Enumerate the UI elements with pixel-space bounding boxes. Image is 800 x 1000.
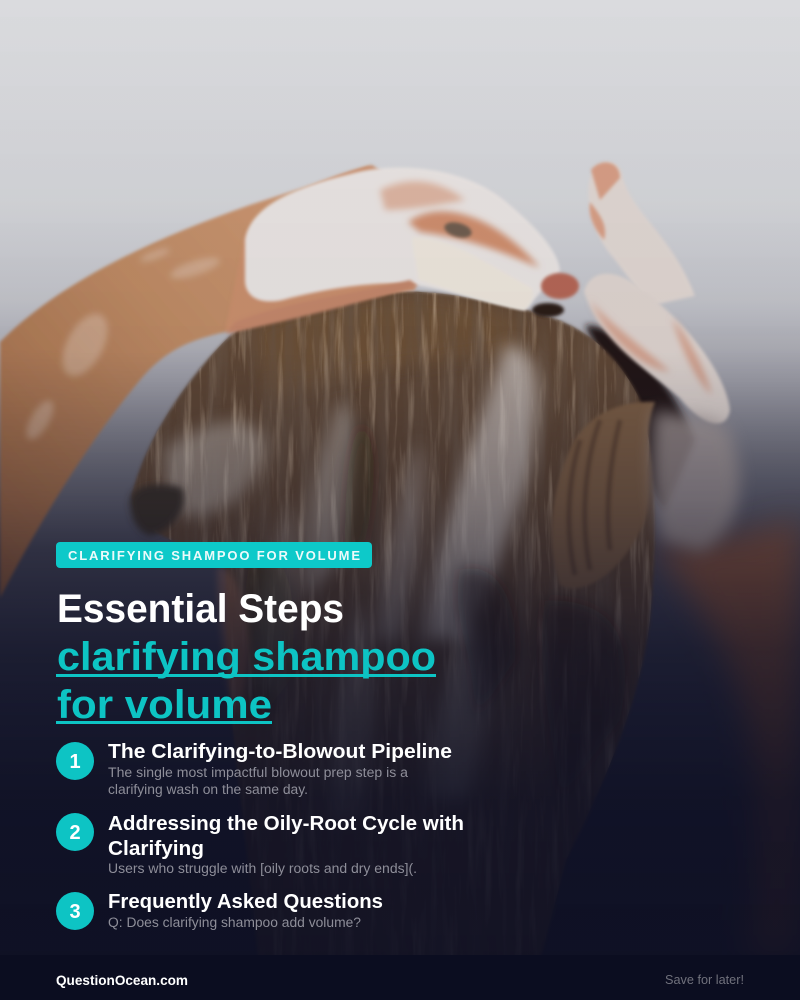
step 3 number [56,892,94,930]
footer bar [0,955,800,1000]
lower finger skin [590,300,712,395]
foam on arm [21,246,222,444]
step 3 number: 3 [69,901,81,923]
finger foam [412,238,533,310]
hair flap on right [552,402,655,588]
step 1 description [108,765,409,797]
curled hair tip [130,484,184,536]
title [56,587,436,727]
nail spot [443,220,473,240]
right hand fingers [532,162,740,552]
step 1 number: 1 [69,751,81,773]
step 3 [56,891,383,930]
upper finger skin [590,162,620,240]
lower finger [584,274,730,424]
foam streaks in hair [165,345,538,820]
neck skin [218,566,250,720]
skin edge under foam [226,280,418,334]
site name: QuestionOcean.com [56,972,188,988]
hair base [132,291,655,1000]
flap strands [569,420,620,575]
dark hollow [532,303,564,317]
dark gap behind right hand [585,325,695,510]
hand skin under foam [225,165,420,332]
step 1 description: clarifying wash on the same day. [108,782,308,797]
left arm [0,166,370,598]
dark hair clumps [246,422,619,762]
step 3 heading: Frequently Asked Questions [108,891,383,913]
hair [127,289,656,955]
step 1 heading: The Clarifying-to-Blowout Pipeline [108,741,452,763]
save for later: Save for later! [665,973,744,987]
step 2 [56,813,464,876]
upper skin patch [380,181,465,210]
step 2 heading: Clarifying [108,838,204,860]
step 2 number: 2 [69,822,81,844]
foam mass [245,168,560,310]
hair roots band [262,292,515,382]
lower palm foam [652,410,740,552]
title line 3 underlined: for volume [57,683,272,727]
fingertip pink [541,273,579,299]
step 2 description: Users who struggle with [oily roots and dry ends](. [108,861,417,876]
left hand foam [225,165,560,334]
category badge: CLARIFYING SHAMPOO FOR VOLUME [68,548,360,563]
step 3 description: Q: Does clarifying shampoo add volume? [108,915,361,930]
title line 1: Essential Steps [57,587,344,631]
step 1 description: The single most impactful blowout prep step is a [108,765,409,780]
hair streak texture [146,292,652,786]
orange knuckle [408,211,540,268]
step 2 heading: Addressing the Oily-Root Cycle with [108,813,464,835]
upper finger [588,162,695,306]
right forearm [655,518,800,960]
step 1 [56,741,452,797]
category badge [56,542,372,568]
step 2 heading [108,813,464,860]
step 2 number [56,813,94,851]
step 1 number [56,742,94,780]
title line 2 underlined: clarifying shampoo [57,635,436,679]
